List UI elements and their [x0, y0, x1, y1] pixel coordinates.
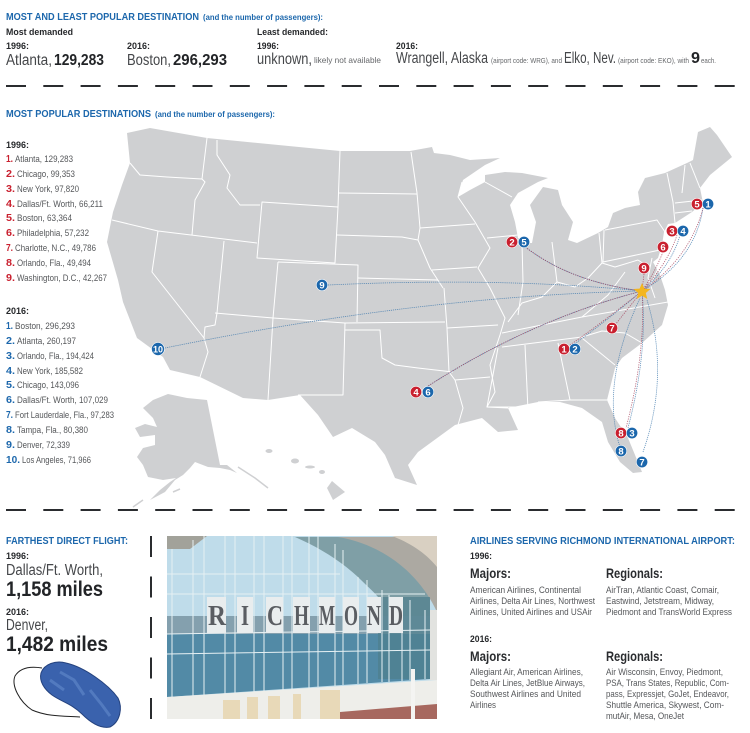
list: 1996 destinations: Atlanta, 129,283 [15, 154, 73, 165]
majors 2016: Airlines [470, 700, 496, 711]
most demanded 2016: 2016: [127, 41, 150, 51]
majors 1996 [470, 565, 595, 618]
farthest flight 2016: 1,482 miles [6, 633, 108, 656]
route markers: 2016: 4 [680, 226, 686, 238]
route markers: 1996: 7 [609, 324, 615, 334]
sign: RICHMOND letters: D [389, 601, 403, 632]
farthest flight 1996: 1996: [6, 551, 29, 561]
least demanded 2016 [396, 41, 716, 67]
least demanded 1996: 1996: [257, 41, 279, 51]
most demanded 1996: 1996: [6, 41, 29, 51]
flight routes [165, 208, 703, 452]
farthest flight 1996: 1,158 miles [6, 578, 103, 601]
list: 1996 destinations: Dallas/Ft. Worth, 66,211 [17, 199, 103, 210]
heading: airlines: AIRLINES SERVING RICHMOND INTERNATIONAL AIRPORT: [470, 536, 735, 547]
farthest flight 2016 [6, 607, 108, 656]
route markers: 1996: 5 [694, 200, 700, 210]
least demanded 2016: Wrangell, Alaska [396, 50, 488, 67]
panel: US map [107, 127, 732, 507]
most demanded 1996: Atlanta, [6, 52, 52, 69]
panel: farthest direct flight [6, 536, 128, 727]
sign: RICHMOND letters: N [367, 601, 381, 632]
list: 1996 destinations: 3. [6, 184, 15, 195]
list: 1996 destinations: New York, 97,820 [17, 184, 79, 195]
route markers: 2016: 6 [425, 388, 431, 398]
majors 2016: Delta Air Lines, JetBlue Airways, [470, 678, 585, 689]
sign: RICHMOND letters: C [267, 601, 283, 632]
least demanded 2016: Elko, Nev. [564, 50, 616, 67]
heading: most popular destinations: MOST POPULAR DESTINATIONS [6, 109, 151, 120]
regionals 1996: Piedmont and TransWorld Express [606, 607, 732, 618]
heading: most and least popular: MOST AND LEAST POPULAR DESTINATION [6, 12, 199, 23]
sign: RICHMOND letters [208, 601, 403, 632]
list: 2016 destinations: Los Angeles, 71,966 [22, 455, 91, 466]
regionals 2016 [606, 648, 729, 722]
regionals 2016: pass, Expressjet, GoJet, Endeavor, [606, 689, 729, 700]
farthest flight 1996 [6, 551, 103, 601]
list: 1996 destinations: 4. [6, 199, 15, 210]
panel: airlines serving Richmond [470, 536, 735, 722]
sign: RICHMOND letters: I [241, 601, 249, 632]
list: 2016 destinations: Denver, 72,339 [17, 440, 70, 451]
map: Alaska [135, 394, 237, 500]
list: 2016 destinations: Chicago, 143,096 [17, 380, 79, 391]
list: 2016 destinations: Dallas/Ft. Worth, 107,029 [17, 395, 108, 406]
list: 2016 destinations: 5. [6, 380, 15, 391]
regionals 1996 [606, 565, 732, 618]
list: 2016 destinations: Orlando, Fla., 194,424 [17, 351, 94, 362]
route markers: 1996 [410, 198, 703, 440]
list: 1996 destinations: 1996: [6, 140, 29, 150]
majors 1996: Airlines, Delta Air Lines, Northwest [470, 596, 595, 607]
list: 2016 destinations: 2016: [6, 306, 29, 316]
majors 1996: American Airlines, Continental [470, 585, 581, 596]
route markers: 2016: 8 [618, 446, 624, 458]
least demanded 1996: likely not available [314, 55, 381, 65]
list: 2016 destinations: New York, 185,582 [17, 366, 83, 377]
map: state borders [112, 138, 702, 425]
route markers: 2016: 10 [153, 344, 163, 354]
regionals 1996: Regionals: [606, 565, 663, 581]
list: 2016 destinations: 7. [6, 410, 13, 421]
least demanded 2016: 2016: [396, 41, 418, 51]
panel: most and least popular destination [6, 12, 716, 69]
list: 1996 destinations: 9. [6, 273, 15, 284]
route markers: 2016: 1 [705, 200, 711, 210]
icon: blue sleep mask [14, 662, 120, 727]
most demanded 2016 [127, 41, 227, 69]
list: 1996 destinations: 8. [6, 258, 15, 269]
subheading: most demanded: Most demanded [6, 27, 73, 37]
list: 2016 destinations: 2. [6, 336, 15, 347]
list: 1996 destinations: 5. [6, 213, 15, 224]
list: 2016 destinations: 8. [6, 425, 15, 436]
least demanded 2016: 9 [691, 50, 700, 67]
list: 1996 destinations: Philadelphia, 57,232 [17, 228, 89, 239]
majors 1996: Majors: [470, 565, 511, 581]
heading: most and least popular: (and the number of passengers): [203, 13, 323, 22]
route markers: 1996: 2 [509, 238, 515, 248]
route markers: 1996: 3 [669, 226, 675, 238]
map: Alaska panhandle and Aleutian islands [133, 467, 268, 507]
route markers: 1996: 4 [413, 388, 419, 398]
list: 1996 destinations: 7. [6, 243, 13, 254]
sign: RICHMOND letters: M [319, 601, 335, 632]
sign: RICHMOND letters: H [294, 601, 309, 632]
list: 2016 destinations: Boston, 296,293 [15, 321, 75, 332]
sign: RICHMOND letters: O [344, 601, 358, 632]
route markers: 1996: 9 [641, 264, 647, 274]
majors 2016: Majors: [470, 648, 511, 664]
list: 2016 destinations: 9. [6, 440, 15, 451]
list: 2016 destinations: 3. [6, 351, 15, 362]
least demanded 2016: (airport code: WRG), and [491, 56, 562, 65]
list: 2016 destinations: 6. [6, 395, 15, 406]
most demanded 2016: 296,293 [173, 52, 227, 69]
regionals 1996: AirTran, Atlantic Coast, Comair, [606, 585, 719, 596]
list: 2016 destinations [6, 306, 114, 466]
list: 2016 destinations: 10. [6, 455, 20, 466]
route markers: 2016: 5 [521, 238, 527, 248]
majors 2016: Allegiant Air, American Airlines, [470, 667, 583, 678]
regionals 2016: mutAir, Mesa, OneJet [606, 711, 684, 722]
subheading: least demanded: Least demanded: [257, 27, 328, 37]
route markers: 1996: 6 [660, 242, 666, 254]
list: 2016 destinations: Atlanta, 260,197 [17, 336, 76, 347]
list: 1996 destinations: 6. [6, 228, 15, 239]
least demanded 2016: (airport code: EKO), with [618, 56, 689, 65]
list: 1996 destinations: Boston, 63,364 [17, 213, 72, 224]
list: 1996 destinations: Washington, D.C., 42,267 [17, 273, 107, 284]
route markers: 2016 [152, 198, 714, 469]
list: 1996 destinations: 1. [6, 154, 13, 165]
majors 2016: Southwest Airlines and United [470, 689, 581, 700]
most demanded 1996 [6, 41, 104, 69]
list: 2016 destinations: 4. [6, 366, 15, 377]
list: 2016 destinations: 1. [6, 321, 13, 332]
list: 1996 destinations: Orlando, Fla., 49,494 [17, 258, 91, 269]
route markers: 2016: 9 [319, 280, 325, 292]
heading: most and least popular [6, 12, 323, 23]
farthest flight 2016: Denver, [6, 617, 48, 634]
list: 1996 destinations [6, 140, 107, 284]
regionals 2016: Regionals: [606, 648, 663, 664]
sign: RICHMOND letters: R [208, 601, 227, 632]
route markers: 2016: 2 [572, 344, 578, 356]
regionals 2016: PSA, Trans States, Republic, Com- [606, 678, 729, 689]
farthest flight 2016: 2016: [6, 607, 29, 617]
majors 1996: Airlines, United Airlines and USAir [470, 607, 592, 618]
list: 2016 destinations: Fort Lauderdale, Fla., 97,283 [15, 410, 114, 421]
list: 1996 destinations: Chicago, 99,353 [17, 169, 75, 180]
route markers: 1996: 8 [618, 428, 624, 440]
map: contiguous United States [107, 127, 732, 485]
list: 2016 destinations: Tampa, Fla., 80,380 [17, 425, 88, 436]
heading: farthest direct flight: FARTHEST DIRECT FLIGHT: [6, 536, 128, 547]
route markers: 2016: 3 [629, 428, 635, 440]
majors 2016 [470, 648, 585, 711]
heading: most popular destinations: (and the number of passengers): [155, 110, 275, 119]
most demanded 1996: 129,283 [54, 52, 104, 69]
regionals 2016: Air Wisconsin, Envoy, Piedmont, [606, 667, 723, 678]
list: 1996 destinations: Charlotte, N.C., 49,786 [15, 243, 96, 254]
year label 1996: 1996: [470, 551, 492, 561]
list: 1996 destinations: 2. [6, 169, 15, 180]
most demanded 2016: Boston, [127, 52, 171, 69]
farthest flight 1996: Dallas/Ft. Worth, [6, 562, 103, 579]
least demanded 1996: unknown, [257, 51, 312, 68]
photo: Richmond airport terminal [167, 536, 437, 719]
least demanded 1996 [257, 41, 381, 68]
star: Richmond [634, 283, 650, 299]
map: Hawaii [266, 449, 345, 500]
regionals 2016: Shuttle America, Skywest, Com- [606, 700, 724, 711]
year label 2016: 2016: [470, 634, 492, 644]
heading: most popular destinations [6, 109, 275, 120]
least demanded 2016: each. [701, 56, 716, 65]
route markers: 2016: 7 [639, 458, 645, 468]
route markers: 1996: 1 [561, 344, 567, 356]
regionals 1996: Eastwind, Jetstream, Midway, [606, 596, 714, 607]
